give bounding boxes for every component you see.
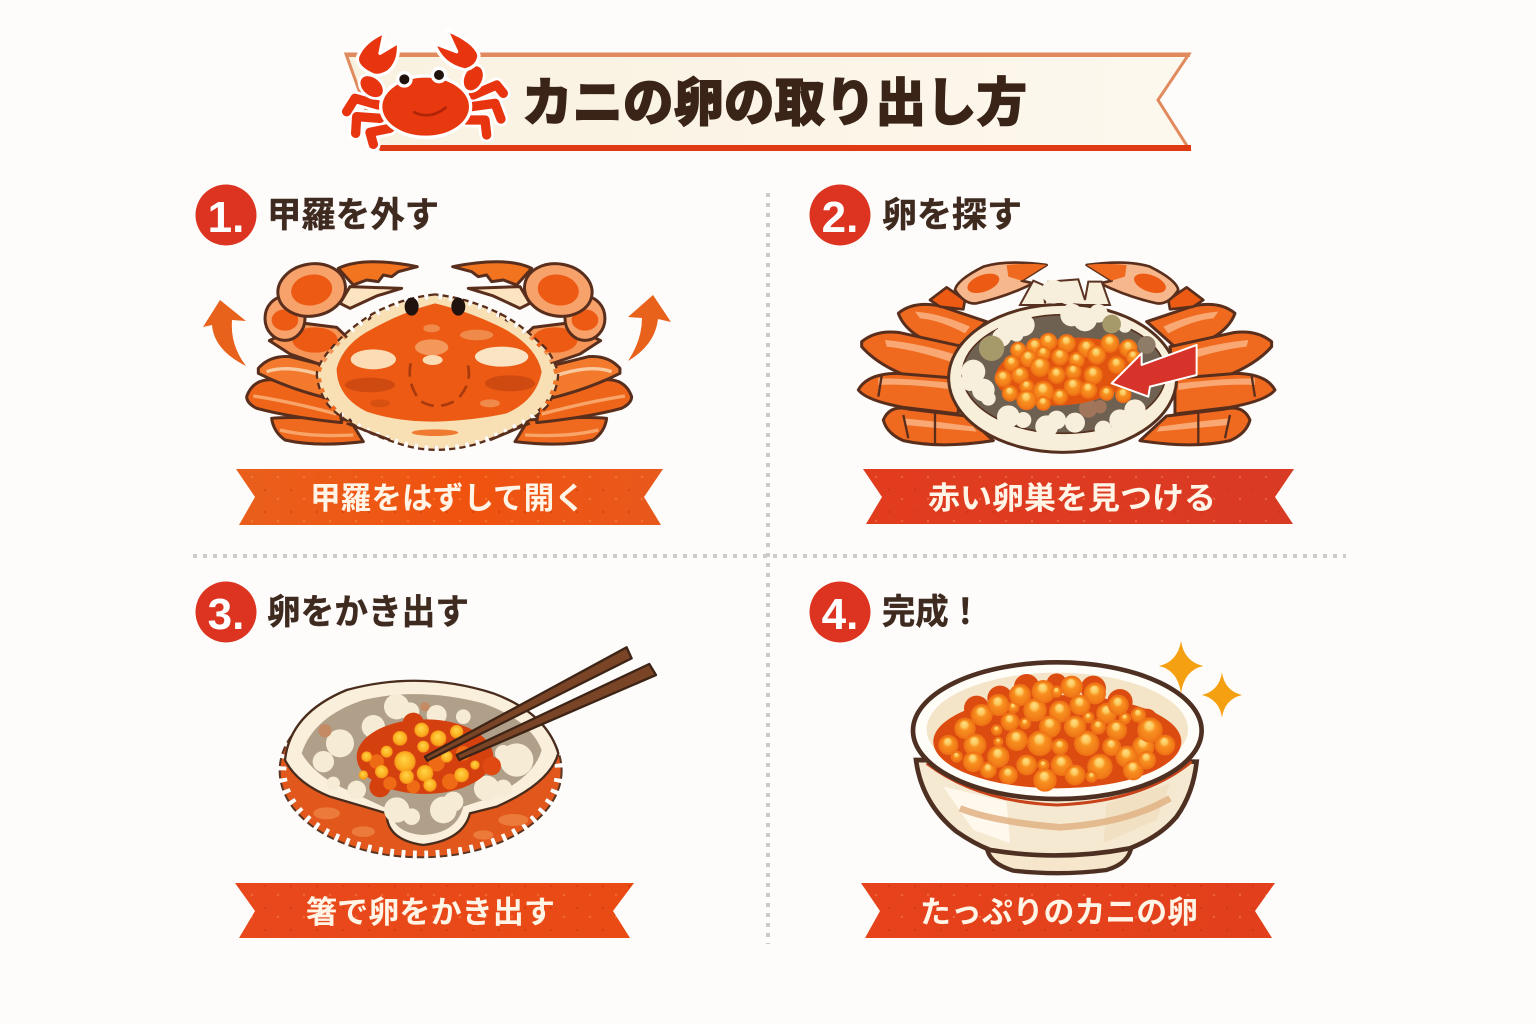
step 1 number badge: 1. xyxy=(208,193,244,242)
sparkle large xyxy=(1159,641,1203,693)
step 2 number badge: 2. xyxy=(822,193,858,242)
step 4 number badge xyxy=(810,582,870,642)
icon: small crab xyxy=(347,30,503,144)
step 3 number badge xyxy=(196,582,256,642)
ribbon bottom strip xyxy=(380,145,1191,151)
mouth area xyxy=(1020,279,1110,305)
caption ribbon 1: 甲羅をはずして開く xyxy=(310,481,585,516)
panel: step 3 xyxy=(196,582,656,938)
illustration: bowl of roe xyxy=(913,641,1242,873)
pale innards xyxy=(961,280,1146,438)
step 3 number badge: 3. xyxy=(208,590,244,639)
roe mass xyxy=(992,331,1141,412)
panel: step 2 xyxy=(810,184,1294,524)
pale innards xyxy=(313,694,533,825)
bowl facets xyxy=(943,787,1010,843)
carapace xyxy=(322,298,553,445)
bowl red line xyxy=(927,762,1192,805)
shell underside xyxy=(285,689,557,852)
brown specks xyxy=(318,702,430,737)
step 4 heading: 完成！ xyxy=(882,593,982,632)
chopsticks xyxy=(425,647,656,761)
caption ribbon 2: 赤い卵巣を見つける xyxy=(928,481,1216,516)
panel: step 4 xyxy=(810,582,1275,938)
title banner xyxy=(346,30,1191,151)
bowl band xyxy=(960,798,1170,827)
arrow: points to roe xyxy=(1112,345,1197,397)
divider: horizontal xyxy=(193,554,1346,558)
caption ribbon 4 xyxy=(861,883,1275,938)
bowl inner xyxy=(927,673,1188,786)
shell interior xyxy=(302,694,542,835)
roe in bowl xyxy=(933,673,1181,791)
panel: step 1 xyxy=(196,184,671,525)
illustration: opened crab with roe xyxy=(858,263,1275,452)
caption ribbon 3: 箸で卵をかき出す xyxy=(306,895,555,930)
ribbon top strip xyxy=(346,53,1190,57)
caption ribbon 4: たっぷりのカニの卵 xyxy=(920,895,1198,930)
bowl foot xyxy=(987,845,1132,873)
step 1 heading: 甲羅を外す xyxy=(267,196,439,235)
caption ribbon 2 xyxy=(863,469,1294,524)
step 2 heading: 卵を探す xyxy=(882,196,1022,235)
step 1 number badge xyxy=(196,184,256,246)
illustration: whole crab xyxy=(247,258,632,445)
ribbon shape xyxy=(346,54,1189,149)
bowl body xyxy=(916,760,1197,855)
roe mass xyxy=(357,713,501,797)
bowl rim xyxy=(913,662,1202,799)
step 4 number badge: 4. xyxy=(822,590,858,639)
arrow: left up xyxy=(203,300,246,366)
sparkle small xyxy=(1202,672,1242,718)
caption ribbon 3 xyxy=(235,883,634,938)
step 3 heading: 卵をかき出す xyxy=(267,593,469,632)
caption ribbon 1 xyxy=(236,469,663,525)
divider: vertical xyxy=(766,193,770,944)
title text: カニの卵の取り出し方 xyxy=(522,75,1027,133)
tan innards xyxy=(979,315,1156,418)
shell rim xyxy=(285,681,558,845)
opened shell xyxy=(949,304,1177,452)
step 2 number badge xyxy=(810,184,870,246)
arrow: right up xyxy=(628,295,671,361)
illustration: shell and chopsticks xyxy=(285,647,656,852)
